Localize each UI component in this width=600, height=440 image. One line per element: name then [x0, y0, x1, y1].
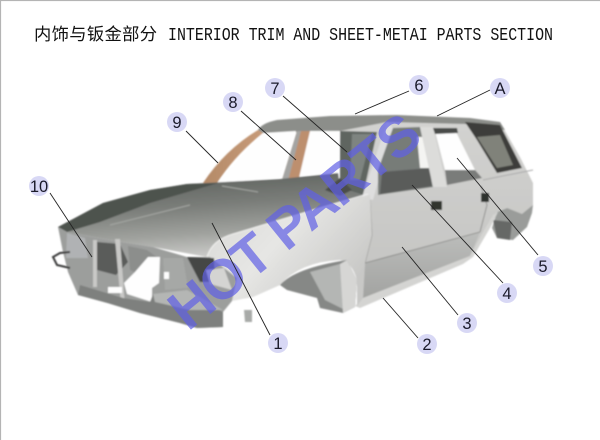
- callout 4: 4: [502, 285, 512, 303]
- door shut lines: [365, 186, 487, 263]
- door A pillar light strip: [362, 122, 393, 200]
- orange A pillar: [203, 130, 263, 183]
- number callouts: [29, 75, 553, 354]
- callout 8: [223, 92, 243, 112]
- callout A: A: [494, 80, 506, 98]
- windshield glass opening: [217, 131, 296, 183]
- dark cabin section: [340, 131, 377, 195]
- side glass opening: [298, 131, 340, 176]
- rear underbody and gearbox: [492, 205, 533, 240]
- hood and fender top: [58, 173, 363, 257]
- front wheel arch: [280, 260, 357, 313]
- body side upper: [340, 122, 533, 307]
- callout 10: 10: [30, 178, 48, 196]
- callout 3: [457, 313, 477, 333]
- front structure: [58, 227, 237, 328]
- callout 8: 8: [228, 94, 238, 112]
- door handles: [431, 201, 442, 210]
- callout 5: 5: [538, 258, 548, 276]
- left posts: [93, 239, 125, 305]
- callout A: [490, 78, 510, 98]
- rear door window: [435, 130, 475, 170]
- callout 6: 6: [414, 77, 424, 95]
- callout 1: [268, 333, 288, 353]
- rear quarter window: [465, 122, 522, 173]
- callout 9: 9: [172, 114, 182, 132]
- cross member: [78, 285, 223, 328]
- roof: [258, 115, 505, 133]
- centre pillar strip: [420, 127, 447, 187]
- orange B pillar: [282, 131, 310, 182]
- hood dark leading band: [58, 183, 218, 232]
- callout 6: [409, 75, 429, 95]
- front door window: [378, 127, 433, 195]
- headlamp bay: [187, 257, 215, 282]
- front bumper bar: [53, 252, 70, 268]
- callout 2: [417, 334, 437, 354]
- fender and front door shoulder: [207, 195, 372, 306]
- title: [34, 20, 553, 46]
- callout 5: [533, 256, 553, 276]
- front opening, white: [124, 257, 160, 302]
- callout 1: 1: [273, 335, 283, 353]
- radiator support dark panel: [97, 242, 128, 275]
- rear quarter crease: [483, 170, 533, 180]
- callout 7: 7: [270, 80, 280, 98]
- callout 4: [497, 283, 517, 303]
- leader lines: [50, 90, 538, 338]
- right upright: [163, 258, 188, 290]
- callout 2: 2: [422, 336, 432, 354]
- callout 9: [167, 112, 187, 132]
- car body illustration: [53, 115, 533, 328]
- crease line: [207, 194, 368, 257]
- tow bracket: [244, 310, 252, 322]
- watermark: HOT PARTS: HOT PARTS: [156, 100, 433, 341]
- sill: [355, 212, 498, 308]
- door lower panel: [363, 232, 480, 298]
- callout 3: 3: [462, 315, 472, 333]
- dash inside cabin: [325, 178, 352, 196]
- callout 7: [265, 78, 285, 98]
- cowl highlight: [110, 186, 258, 225]
- title: 内饰与钣金部分: [34, 20, 157, 45]
